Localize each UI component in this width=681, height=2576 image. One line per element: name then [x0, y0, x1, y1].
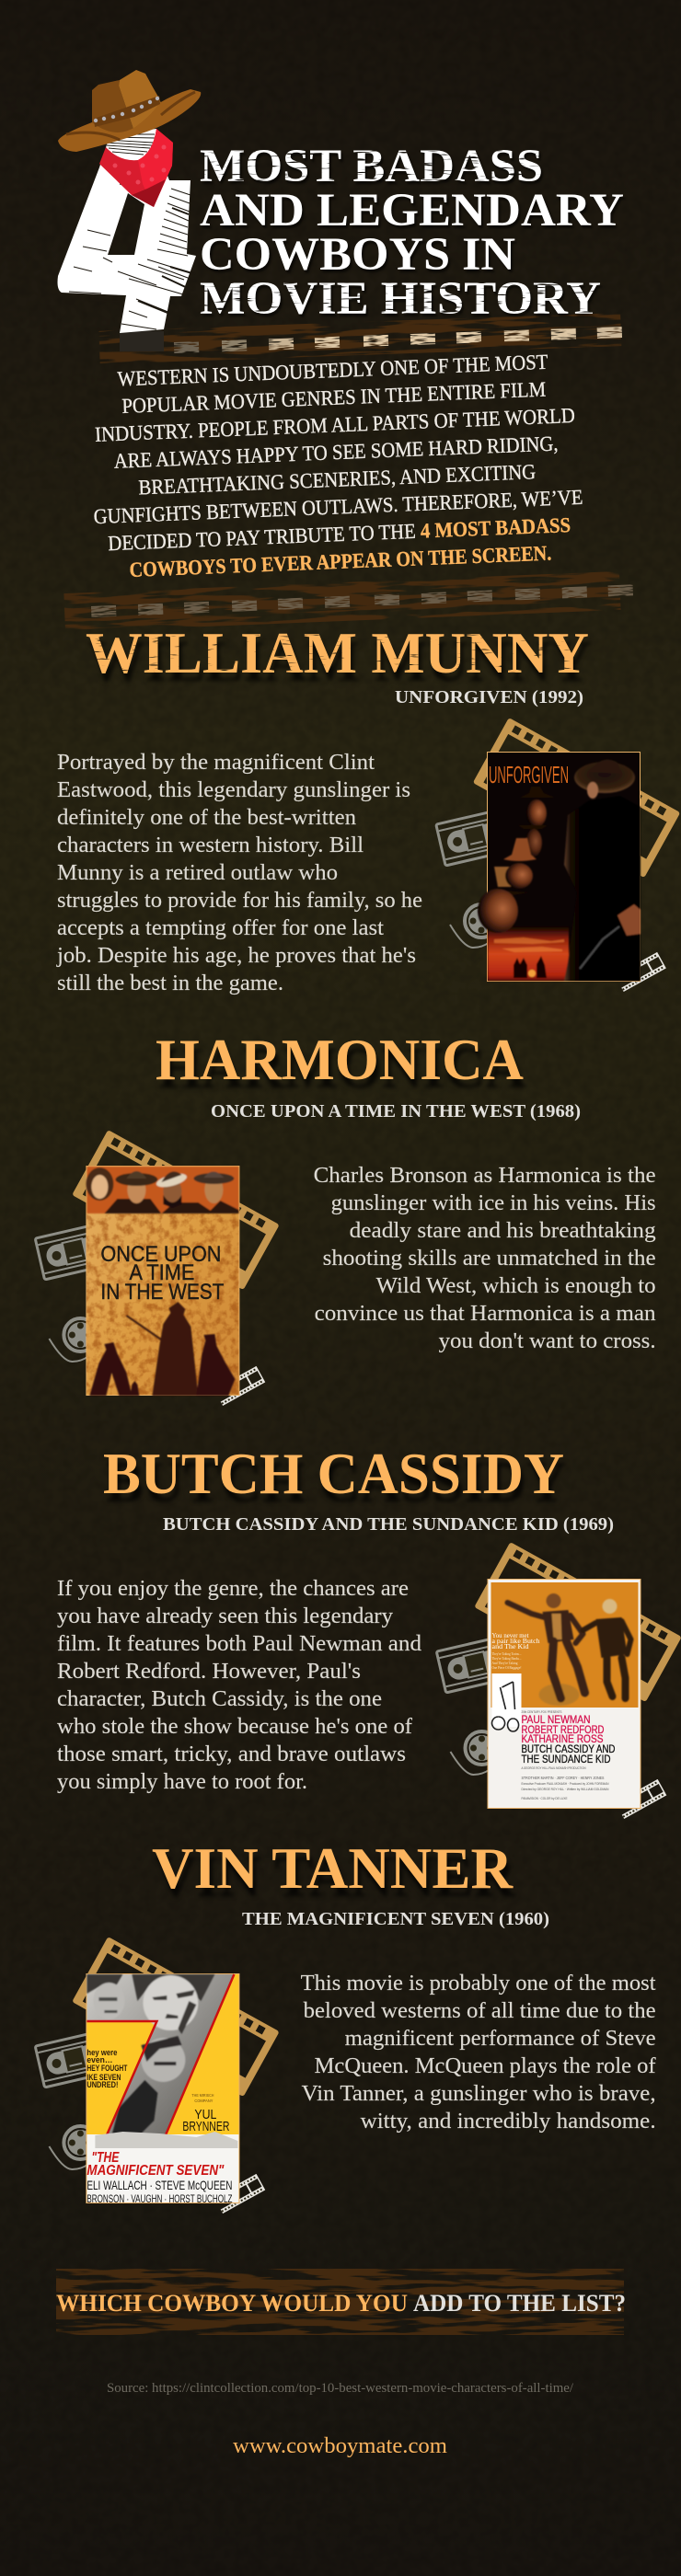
text block: Vin Tanner — [301, 1972, 656, 2133]
number 4 — [57, 129, 196, 351]
text block: William Munny: job. Despite his age, he proves that he's — [56, 944, 416, 968]
poster group: Once Upon a Time in the West — [35, 1130, 280, 1406]
text block: Harmonica: deadly stare and his breathtaking — [350, 1219, 656, 1243]
text block: Butch Cassidy: character, Butch Cassidy, is the one — [57, 1687, 382, 1711]
poster: The Magnificent Seven: BRONSON · VAUGHN · HORST BUCHOLZ — [87, 2192, 232, 2205]
text block: Butch Cassidy: those smart, tricky, and brave outlaws — [57, 1742, 406, 1766]
poster: The Magnificent Seven: COMPANY — [194, 2099, 213, 2103]
text block: William Munny: definitely one of the best-written — [57, 806, 356, 830]
icon: video cassette — [436, 1636, 516, 1693]
poster: Unforgiven: UNFORGIVEN — [489, 761, 569, 788]
text block: Harmonica: Charles Bronson as Harmonica is the — [314, 1164, 656, 1188]
text block: Harmonica: Wild West, which is enough to — [376, 1274, 656, 1298]
icon: film strip — [473, 718, 680, 878]
text block: William Munny — [56, 751, 422, 995]
text block: William Munny: Munny is a retired outlaw who — [57, 861, 338, 885]
text block: Harmonica: shooting skills are unmatched in the — [323, 1247, 656, 1271]
poster: Butch Cassidy: and The Kid — [491, 1642, 529, 1650]
poster: Once Upon a Time in the West: IN THE WEST — [100, 1280, 225, 1305]
icon: small film frame — [615, 952, 665, 992]
poster: Butch Cassidy: They're Taking Banks... — [491, 1656, 521, 1661]
intro paragraph: WESTERN IS UNDOUBTEDLY ONE OF THE MOST — [117, 351, 548, 390]
icon: small film frame — [615, 1779, 666, 1819]
text block: Butch Cassidy: Robert Redford. However, Paul's — [57, 1660, 361, 1684]
text block: Butch Cassidy: you simply have to root for. — [57, 1770, 307, 1794]
poster: The Magnificent Seven: BRYNNER — [182, 2119, 230, 2134]
poster: The Magnificent Seven: HEY FOUGHT — [87, 2064, 128, 2073]
poster: Once Upon a Time in the West: ONCE UPON — [100, 1242, 221, 1267]
text block: William Munny: still the best in the game. — [57, 972, 283, 995]
poster: The Magnificent Seven — [87, 1974, 239, 2205]
closing question with wood stripe: ADD TO THE LIST? — [413, 2290, 626, 2317]
intro paragraph: DECIDED TO PAY TRIBUTE TO THE 4 MOST BADASS — [108, 513, 571, 555]
text block: William Munny: Portrayed by the magnificent Clint — [57, 751, 375, 775]
poster: The Magnificent Seven: hey were — [87, 2048, 117, 2057]
poster: The Magnificent Seven: THE MIRISCH — [191, 2093, 214, 2098]
text block: William Munny: struggles to provide for his family, so he — [57, 889, 422, 913]
subheading: Unforgiven: UNFORGIVEN (1992) — [395, 687, 583, 707]
poster group: The Magnificent Seven — [35, 1937, 280, 2214]
text block: Vin Tanner: magnificent performance of Steve — [345, 2027, 656, 2051]
text block: Harmonica: you don't want to cross. — [439, 1329, 656, 1353]
icon: film reel — [450, 904, 498, 948]
text block: Butch Cassidy: who stole the show because he's one of — [57, 1715, 412, 1739]
wood stripe behind title — [98, 313, 622, 364]
intro paragraph: POPULAR MOVIE GENRES IN THE ENTIRE FILM — [121, 378, 547, 418]
poster: The Magnificent Seven: YUL — [194, 2107, 216, 2122]
poster: The Magnificent Seven: ELI WALLACH · STEVE McQUEEN — [87, 2178, 232, 2192]
text block: Harmonica: gunslinger with ice in his veins. His — [331, 1191, 656, 1215]
title: MOVIE HISTORY — [200, 273, 601, 325]
poster group: Butch Cassidy — [436, 1542, 681, 1819]
icon: small film frame — [214, 2174, 265, 2214]
closing question with wood stripe — [56, 2269, 626, 2335]
poster: Butch Cassidy: ROBERT REDFORD — [521, 1723, 605, 1736]
title — [200, 141, 624, 325]
bandana — [99, 129, 173, 207]
text block: Vin Tanner: beloved westerns of all time due to the — [304, 1999, 656, 2023]
text block: Butch Cassidy — [57, 1577, 421, 1794]
icon: film reel — [49, 2126, 97, 2169]
intro paragraph: ARE ALWAYS HAPPY TO SEE SOME HARD RIDING, — [113, 431, 559, 473]
poster group: Unforgiven — [436, 718, 680, 992]
icon: film reel — [49, 1318, 97, 1362]
wood stripe under intro — [63, 570, 634, 632]
subheading: Once Upon a Time in the West: ONCE UPON A TIME IN THE WEST (1968) — [211, 1101, 581, 1121]
icon: video cassette — [35, 1223, 115, 1280]
poster: Once Upon a Time in the West: A TIME — [129, 1260, 194, 1285]
text block: Vin Tanner: Vin Tanner, a gunslinger who is brave, — [302, 2082, 656, 2106]
heading: Butch Cassidy: BUTCH CASSIDY — [103, 1441, 564, 1506]
heading: Vin Tanner: VIN TANNER — [152, 1835, 514, 1901]
text block: Vin Tanner: witty, and incredibly handsome. — [361, 2110, 656, 2133]
poster: Butch Cassidy: Directed by GEORGE ROY HILL · Written by WILLIAM GOLDMAN — [521, 1788, 609, 1791]
icon: film strip — [72, 1937, 280, 2097]
poster: Butch Cassidy: KATHARINE ROSS — [521, 1732, 604, 1745]
poster: Unforgiven — [478, 753, 641, 981]
heading: Harmonica: HARMONICA — [156, 1027, 524, 1092]
poster: Butch Cassidy: PAUL NEWMAN — [521, 1713, 591, 1726]
text block: William Munny: accepts a tempting offer for one last — [57, 916, 384, 940]
poster: The Magnificent Seven: even… — [87, 2055, 112, 2064]
poster: Butch Cassidy: And They're Taking — [491, 1661, 518, 1665]
poster: The Magnificent Seven: "THE — [91, 2150, 120, 2166]
icon: video cassette — [35, 2030, 115, 2087]
poster: Butch Cassidy: 20th CENTURY-FOX PRESENTS — [521, 1710, 562, 1714]
poster: Butch Cassidy: One Piece Of Baggage! — [491, 1665, 522, 1670]
text block: Butch Cassidy: If you enjoy the genre, the chances are — [57, 1577, 409, 1601]
poster: Butch Cassidy: THE SUNDANCE KID — [521, 1753, 611, 1765]
poster: The Magnificent Seven: UNDRED! — [87, 2080, 118, 2089]
icon: film strip — [474, 1542, 681, 1702]
text block: Vin Tanner: This movie is probably one of the most — [301, 1972, 656, 1995]
closing question with wood stripe: WHICH COWBOY WOULD YOU — [56, 2290, 408, 2317]
icon: film reel — [451, 1731, 499, 1775]
poster: Butch Cassidy — [488, 1579, 641, 1809]
poster: Butch Cassidy: BUTCH CASSIDY AND — [521, 1742, 616, 1755]
intro paragraph: COWBOYS TO EVER APPEAR ON THE SCREEN. — [129, 542, 552, 581]
text block: William Munny: Eastwood, this legendary gunslinger is — [57, 778, 410, 802]
title: AND LEGENDARY — [200, 185, 624, 236]
heading: William Munny: WILLIAM MUNNY — [86, 620, 589, 685]
text block: Butch Cassidy: you have already seen this legendary — [57, 1604, 393, 1628]
poster: The Magnificent Seven: IKE SEVEN — [87, 2073, 121, 2082]
text block: Butch Cassidy: film. It features both Paul Newman and — [57, 1632, 421, 1656]
intro paragraph: INDUSTRY. PEOPLE FROM ALL PARTS OF THE WORLD — [95, 404, 575, 446]
text block: Vin Tanner: McQueen. McQueen plays the role of — [315, 2054, 656, 2078]
icon: small film frame — [214, 1366, 265, 1406]
source: Source: https://clintcollection.com/top-10-best-western-movie-characters-of-all-time/ — [107, 2381, 574, 2396]
poster: Once Upon a Time in the West — [86, 1167, 239, 1396]
poster: Butch Cassidy: They're Taking Trains... — [491, 1651, 521, 1656]
title: COWBOYS IN — [200, 229, 515, 281]
poster: Butch Cassidy: PANAVISION · COLOR by DE LUXE — [521, 1797, 568, 1800]
poster: Butch Cassidy: You never met — [491, 1631, 529, 1639]
poster: Butch Cassidy: Executive Producer PAUL MONASH · Produced by JOHN FOREMAN — [521, 1782, 609, 1786]
text block: Harmonica — [314, 1164, 656, 1353]
website: www.cowboymate.com — [233, 2434, 447, 2458]
cowboy hat — [58, 70, 201, 152]
intro paragraph: GUNFIGHTS BETWEEN OUTLAWS. THEREFORE, WE’VE — [93, 486, 583, 528]
poster: Butch Cassidy: A GEORGE ROY HILL-PAUL MONASH PRODUCTION — [521, 1766, 586, 1770]
poster: Butch Cassidy: a pair like Butch — [491, 1637, 540, 1645]
poster: Butch Cassidy: STROTHER MARTIN · JEFF COREY · HENRY JONES — [521, 1776, 604, 1780]
title: MOST BADASS — [200, 141, 543, 192]
text block: William Munny: characters in western history. Bill — [57, 834, 364, 857]
poster: The Magnificent Seven: MAGNIFICENT SEVEN" — [87, 2163, 225, 2179]
big number four with hat and bandana — [57, 70, 201, 351]
intro paragraph: BREATHTAKING SCENERIES, AND EXCITING — [138, 460, 537, 499]
icon: video cassette — [436, 809, 515, 866]
icon: film strip — [72, 1130, 280, 1290]
subheading: The Magnificent Seven: THE MAGNIFICENT SEVEN (1960) — [242, 1909, 549, 1929]
text block: Harmonica: convince us that Harmonica is a man — [315, 1302, 656, 1326]
intro paragraph — [87, 349, 585, 582]
subheading: Butch Cassidy and the Sundance Kid: BUTCH CASSIDY AND THE SUNDANCE KID (1969) — [163, 1514, 614, 1535]
